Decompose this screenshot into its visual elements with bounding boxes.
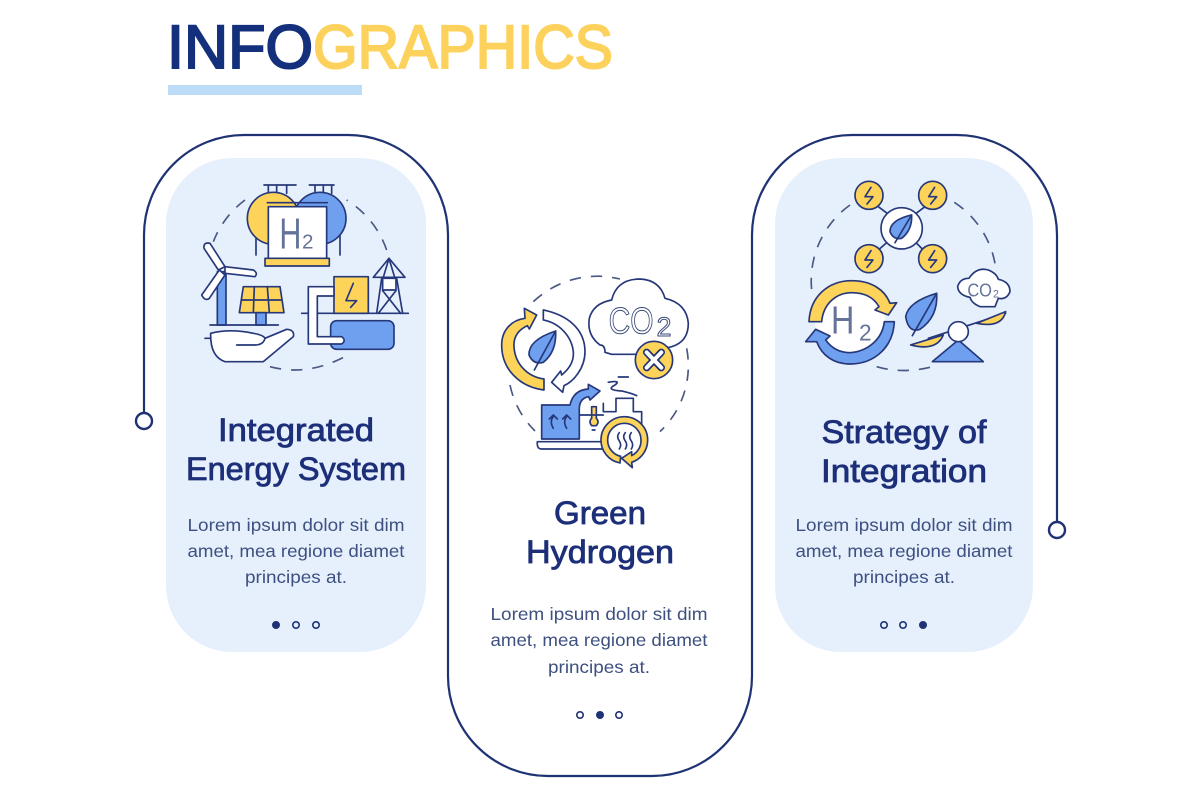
connecting outline around panels xyxy=(144,135,1057,776)
pagination dots: center xyxy=(577,712,622,718)
icon: green hydrogen xyxy=(502,276,688,468)
text: center description: amet, mea regione diamet xyxy=(490,630,708,650)
text: left description: amet, mea regione diamet xyxy=(188,541,405,561)
icon: strategy of integration xyxy=(806,181,1010,370)
text: center description: principes at. xyxy=(548,657,650,677)
heading: green hydrogen: Hydrogen xyxy=(526,534,674,570)
icon: integrated energy system: 2 xyxy=(302,230,313,253)
heading: integrated energy system: Integrated xyxy=(218,412,374,448)
icon: green hydrogen: 2 xyxy=(657,312,671,342)
icon: strategy of integration: 2 xyxy=(993,289,999,301)
text: right description: Lorem ipsum dolor sit dim xyxy=(796,515,1012,535)
heading: strategy of integration: Strategy of xyxy=(822,414,987,450)
pagination dots: left xyxy=(273,622,319,628)
left outline end marker xyxy=(136,413,152,429)
heading: integrated energy system xyxy=(186,412,406,487)
icon: strategy of integration: CO xyxy=(967,280,992,301)
title xyxy=(167,13,613,81)
heading: strategy of integration xyxy=(821,414,987,489)
title: GRAPHICS xyxy=(313,13,613,81)
title underline xyxy=(168,85,362,95)
title: INFO xyxy=(167,13,313,81)
text: center description xyxy=(490,604,708,677)
panel: left background xyxy=(166,158,426,652)
icon: strategy of integration: 2 xyxy=(859,320,872,346)
text: left description: Lorem ipsum dolor sit dim xyxy=(188,515,404,535)
panel: right background xyxy=(775,158,1033,652)
pagination dots: right xyxy=(881,622,926,628)
text: left description: principes at. xyxy=(245,567,347,587)
icon: strategy of integration: H xyxy=(831,298,854,342)
icon: integrated energy system: H xyxy=(279,210,301,258)
heading: green hydrogen xyxy=(526,495,674,570)
right outline end marker xyxy=(1049,522,1065,538)
icon: integrated energy system xyxy=(202,185,408,370)
text: right description: amet, mea regione diamet xyxy=(796,541,1013,561)
text: right description: principes at. xyxy=(853,567,955,587)
text: left description xyxy=(188,515,405,587)
text: center description: Lorem ipsum dolor sit dim xyxy=(490,604,708,624)
text: right description xyxy=(796,515,1013,587)
heading: integrated energy system: Energy System xyxy=(186,451,406,487)
icon: green hydrogen: CO xyxy=(609,299,654,341)
heading: green hydrogen: Green xyxy=(554,495,646,531)
heading: strategy of integration: Integration xyxy=(821,453,987,489)
